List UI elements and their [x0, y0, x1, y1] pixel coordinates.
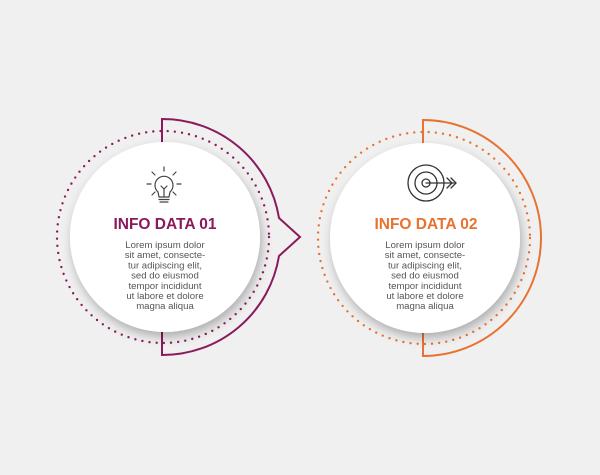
- white circle 01: [70, 142, 260, 332]
- body text 02: sed do eiusmod: [391, 271, 459, 282]
- body text 02: tur adipiscing elit,: [388, 260, 462, 271]
- icon: light bulb: [147, 167, 181, 202]
- body text 01: Lorem ipsum dolor: [125, 240, 206, 251]
- dotted ring 01: [57, 131, 269, 343]
- white circle 02: [330, 143, 520, 333]
- body text 01: tur adipiscing elit,: [128, 260, 202, 271]
- outer arc with arrow 01: [162, 119, 300, 355]
- body text 02: ut labore et dolore: [386, 291, 464, 302]
- body text 02: magna aliqua: [396, 301, 454, 312]
- body text 02: sit amet, consecte-: [385, 250, 465, 261]
- body text 02: Lorem ipsum dolor: [385, 240, 466, 251]
- body text 01: magna aliqua: [136, 301, 194, 312]
- panel: info data 02: [318, 120, 541, 356]
- body text 01: sit amet, consecte-: [125, 250, 205, 261]
- heading 01: INFO DATA 01: [113, 216, 217, 233]
- body text 02: tempor incididunt: [388, 281, 462, 292]
- icon: target: [408, 165, 456, 201]
- heading 02: INFO DATA 02: [374, 216, 478, 233]
- panel: info data 01: [57, 119, 300, 355]
- body text 01: sed do eiusmod: [131, 271, 199, 282]
- body text 01: tempor incididunt: [128, 281, 202, 292]
- body text 01: ut labore et dolore: [126, 291, 204, 302]
- outer arc 02: [423, 120, 541, 356]
- dotted ring 02: [318, 132, 530, 344]
